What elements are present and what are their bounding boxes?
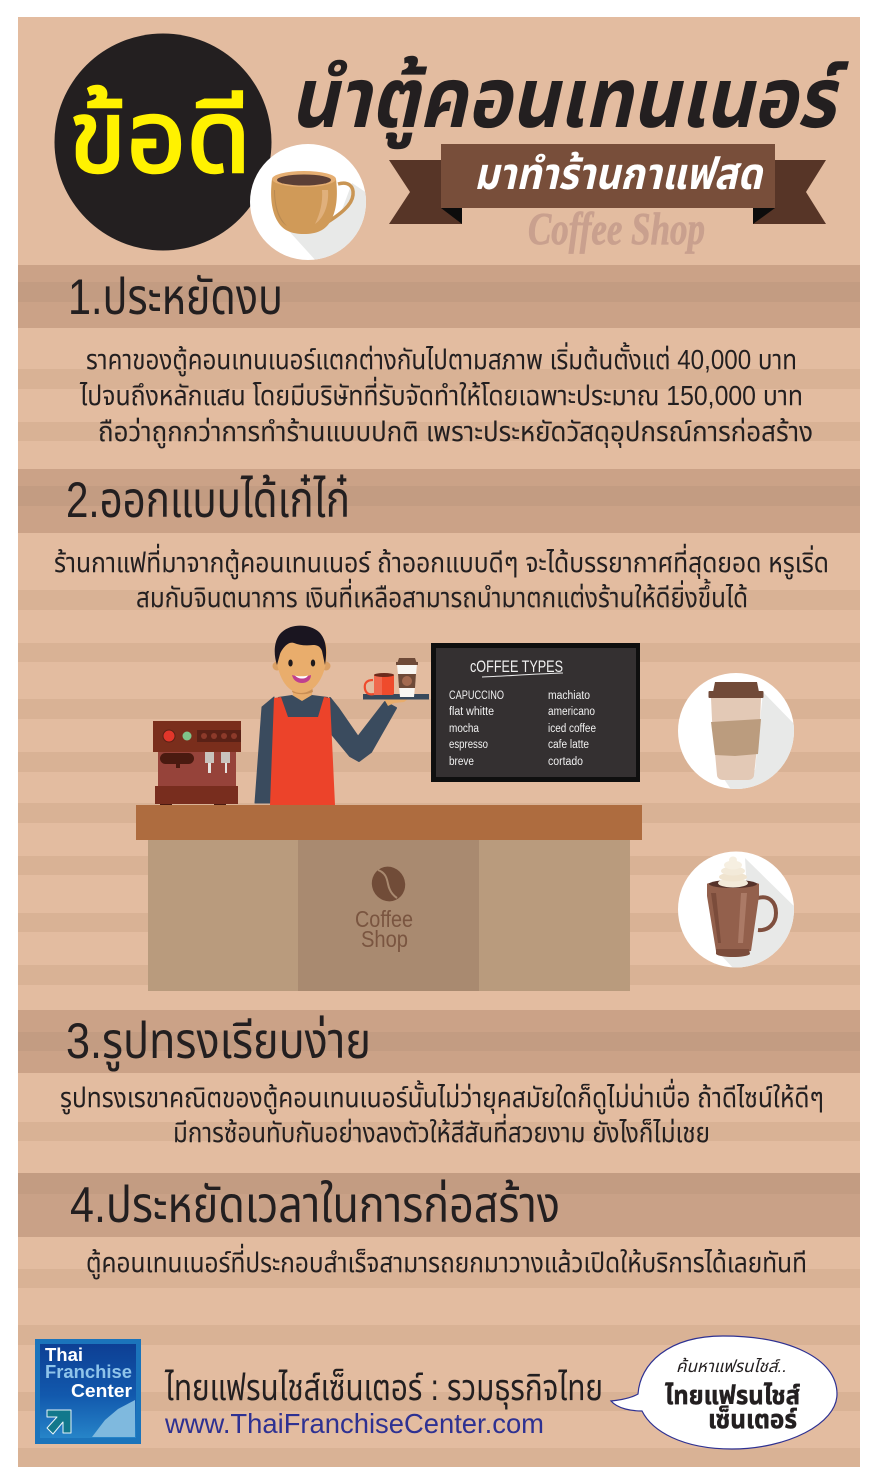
illustration: menu board: cOFFEE TYPES	[470, 657, 563, 676]
illustration: menu board: mocha	[449, 723, 480, 735]
illustration: counter: Shop	[361, 926, 408, 952]
section 1 text: ไปจนถึงหลักแสน โดยมีบริษัทที่รับจัดทำให้โดยเฉพาะประมาณ 150,000 บาท	[79, 376, 803, 411]
illustration: counter: Coffee	[355, 906, 413, 932]
section 4 heading	[18, 1173, 860, 1237]
icon: mocha glass	[678, 852, 800, 970]
footer: company name: ไทยแฟรนไชส์เซ็นเตอร์ : รวมธุรกิจไทย	[164, 1367, 603, 1410]
logo: Thai Franchise Center: Franchise	[45, 1361, 132, 1382]
section 1 heading: 1.ประหยัดงบ	[68, 269, 283, 325]
illustration: menu board: flat whitte	[449, 706, 494, 718]
section 1 text: ถือว่าถูกกว่าการทำร้านแบบปกติ เพราะประหยัดวัสดุอุปกรณ์การก่อสร้าง	[98, 416, 813, 449]
illustration: counter	[136, 805, 642, 991]
speech bubble: ค้นหาแฟรนไชส์..	[676, 1357, 787, 1376]
section 3 text	[60, 1078, 824, 1148]
section 2 text	[54, 543, 829, 613]
section 4 heading: 4.ประหยัดเวลาในการก่อสร้าง	[70, 1177, 560, 1233]
illustration: menu board: breve	[449, 756, 474, 768]
footer: website: www.ThaiFranchiseCenter.com	[164, 1408, 544, 1439]
illustration: menu board: iced coffee	[548, 723, 596, 735]
illustration: menu board: CAPUCCINO	[449, 690, 504, 702]
section 3 heading	[18, 1010, 860, 1073]
icon: takeaway cup	[678, 673, 794, 789]
section 3 heading: 3.รูปทรงเรียบง่าย	[66, 1013, 371, 1071]
illustration: menu board: espresso	[449, 739, 488, 751]
illustration: barista	[255, 626, 429, 805]
section 2 heading: 2.ออกแบบได้เก๋ไก๋	[66, 472, 350, 528]
logo: Thai Franchise Center: Thai	[45, 1344, 83, 1365]
logo: Thai Franchise Center: Center	[71, 1380, 132, 1401]
section 2 heading	[18, 469, 860, 533]
subtitle: Coffee Shop: Coffee Shop	[528, 203, 705, 254]
badge: ข้อดี: ข้อดี	[69, 80, 251, 194]
ribbon banner: มาทำร้านกาแฟสด	[474, 150, 764, 199]
illustration: menu board: cortado	[548, 756, 583, 768]
illustration: menu board: americano	[548, 706, 595, 718]
section 3 text: มีการซ้อนทับกันอย่างลงตัวให้สีสันที่สวยงาม ยังไงก็ไม่เชย	[173, 1113, 710, 1148]
speech bubble	[611, 1336, 837, 1449]
illustration: menu board: cafe latte	[548, 739, 589, 751]
section 1 heading	[18, 265, 860, 328]
badge: ข้อดี	[54, 34, 272, 250]
ribbon banner	[389, 144, 826, 224]
speech bubble: ไทยแฟรนไชส์	[665, 1380, 800, 1410]
illustration: menu board	[431, 643, 640, 782]
illustration: menu board: machiato	[548, 690, 590, 702]
illustration: coffee machine	[153, 721, 241, 805]
logo: Thai Franchise Center	[35, 1339, 141, 1444]
icon: coffee cup	[250, 144, 370, 262]
section 1 text	[79, 342, 813, 449]
section 2 text: สมกับจินตนาการ เงินที่เหลือสามารถนำมาตกแต่งร้านให้ดียิ่งขึ้นได้	[136, 578, 748, 613]
speech bubble: เซ็นเตอร์	[708, 1404, 797, 1434]
